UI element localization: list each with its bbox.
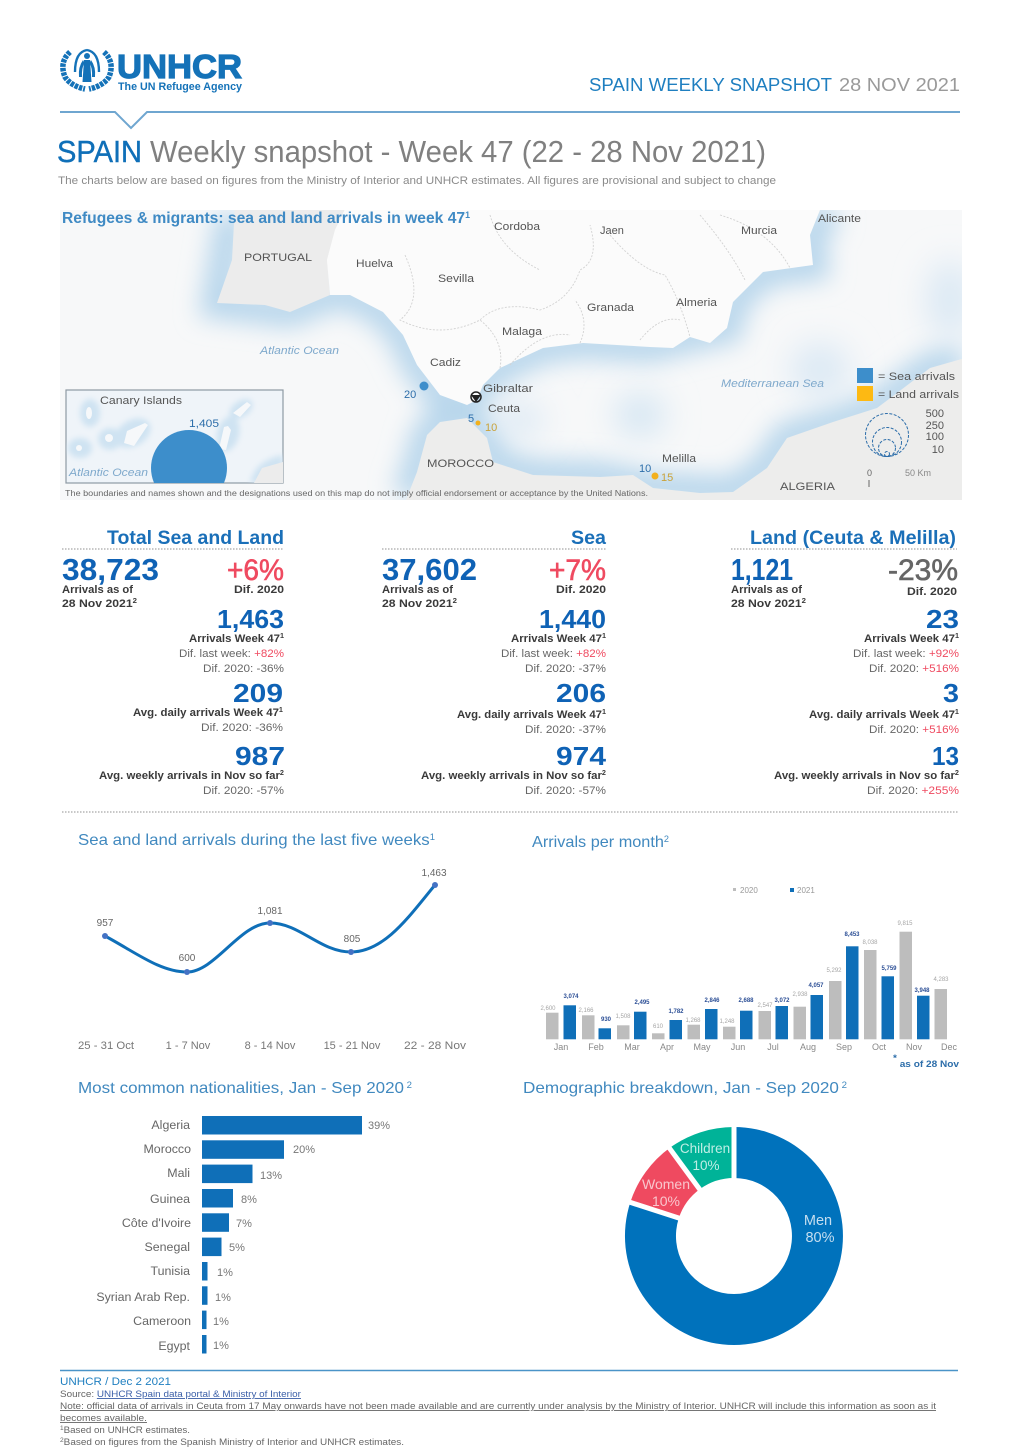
heading: nationalities: 2 [404,1080,412,1090]
line chart: last five weeks: 22 - 28 Nov [404,1040,467,1052]
stat: weekly average: Dif. 2020: -57% [203,785,284,797]
bar chart: arrivals per month: 3,072 [774,998,790,1004]
stat: daily arrivals: Dif. 2020: -36% [201,722,283,734]
logo tagline: The UN Refugee Agency [118,81,243,93]
line chart: last five weeks [78,868,467,1052]
stat: land arrivals: 1,121 [731,552,793,587]
heading: five weeks chart: Sea and land arrivals during the last five weeks [78,832,412,849]
header date line [589,75,960,95]
bar chart: arrivals per month: 3,074 [563,994,579,1000]
map legend: = Sea arrivals [878,371,956,383]
bar chart: arrivals per month: 2,846 [704,998,720,1004]
line chart: last five weeks: 8 - 14 Nov [245,1040,296,1052]
bar chart: arrivals per month: May [693,1042,711,1052]
bar chart: nationalities: 1% [217,1267,233,1279]
map place labels: ALGERIA [780,481,836,493]
bar chart: nationalities: Algeria [151,1118,190,1132]
stat: sea weekly average [421,741,607,797]
stat: land weekly average [774,741,959,797]
line chart: last five weeks: 957 [97,918,114,929]
bar chart: nationalities: Egypt [158,1339,191,1353]
bar chart: arrivals per month: 8,453 [844,932,860,938]
map place labels: MOROCCO [427,458,494,470]
stat: weekly arrivals: 1 [280,633,284,640]
bar chart: arrivals per month: 4,283 [933,977,949,983]
bar chart: arrivals per month: 1,782 [668,1009,684,1015]
title: Weekly snapshot - Week 47 (22 - 28 Nov 2021) [150,134,766,169]
bar chart: arrivals per month: Nov [906,1042,922,1052]
bar chart: nationalities: 7% [236,1218,252,1230]
map title: 1 [465,210,470,220]
map place labels: Alicante [818,213,861,225]
map markers: arrivals: 20 [404,389,416,401]
chart note: * [893,1053,897,1063]
map place labels: Atlantic Ocean [259,345,339,357]
bar chart: nationalities: Senegal [145,1240,190,1254]
stat: sea weekly arrivals: Arrivals Week 47 [511,633,599,645]
bar chart: arrivals per month: 5,759 [881,966,897,972]
bar chart: nationalities: Tunisia [151,1264,190,1278]
subtitle: The charts below are based on figures from the Ministry of Interior and UNHCR estimates. All figures are provisional and subject to change [58,175,776,187]
stat: daily arrivals: Avg. daily arrivals Week 47 [133,707,274,719]
stat: sea difference 2020: +7% [549,554,606,587]
panel: land [731,528,959,797]
map place labels: Sevilla [438,273,475,285]
stat: land weekly arrivals: 1 [955,633,959,640]
logo wordmark: UNHCR [117,48,242,85]
map legend: 500 [926,408,944,420]
stat: land daily arrivals: 3 [943,678,959,708]
map place labels: Murcia [741,225,778,237]
segment: women [630,1148,700,1218]
footer: sources and notes: becomes available. [60,1413,147,1423]
map place labels: Mediterranean Sea [721,378,824,390]
bar chart: nationalities: 1% [213,1316,229,1328]
map markers: arrivals: 10 [485,422,497,434]
stat: sea weekly average: Dif. 2020: -57% [525,785,606,797]
bar chart: arrivals per month: Jul [767,1042,779,1052]
title: SPAIN [57,134,142,169]
heading: demographics: 2 [839,1080,847,1090]
bar chart: arrivals per month: 1,268 [685,1018,701,1024]
bar chart: nationalities: Mali [167,1166,190,1180]
stat: total arrivals: 28 Nov 2021 [62,598,126,610]
stat: weekly arrivals: 1,463 [217,604,284,634]
heading: demographics: Demographic breakdown, Jan - Sep 2020 [523,1080,818,1097]
segment: women: 10% [652,1193,680,1209]
stat: total arrivals: Arrivals as of [62,584,133,596]
stat: weekly arrivals: Dif. 2020: -36% [203,663,284,675]
bar chart: arrivals per month: Aug [800,1042,816,1052]
map place labels: Ceuta [488,403,521,415]
stat: land difference 2020: -23% [888,554,958,587]
panel: map of sea and land arrivals [60,205,974,506]
land: North Africa [404,358,965,505]
bar chart: nationalities: Syrian Arab Rep. [96,1290,190,1304]
stat: land arrivals: 28 Nov 2021 [731,598,795,610]
stat: sea weekly arrivals: Dif. 2020: -37% [525,663,606,675]
bar chart: nationalities: Côte d'Ivoire [122,1216,191,1230]
segment: men [625,1127,843,1345]
map legend: 0 [867,468,872,478]
map place labels: PORTUGAL [244,252,312,264]
map markers: arrivals: 5 [468,413,474,425]
bar chart: arrivals per month: 8,038 [862,940,878,946]
stat: weekly average: Avg. weekly arrivals in Nov so far [99,770,273,782]
line chart: last five weeks: 1 - 7 Nov [166,1040,211,1052]
segment: children: 10% [692,1158,720,1173]
header date line: SPAIN WEEKLY SNAPSHOT [589,75,832,95]
heading: nationalities: Most common nationalities, Jan - Sep 2020 [78,1080,385,1097]
line chart: last five weeks: 25 - 31 Oct [78,1040,134,1052]
icon: UNHCR emblem [63,50,111,89]
footer: sources and notes: 1 [60,1426,64,1432]
line chart: last five weeks: 805 [344,934,361,945]
segment: children [670,1127,734,1189]
bar chart: nationalities: 8% [241,1194,257,1206]
stat: sea weekly arrivals [501,604,606,675]
map inset: Canary Islands: Canary Islands [100,395,183,407]
stat: weekly average: 2 [280,770,284,777]
heading: sea: Sea [571,528,606,549]
map legend: 250 [926,420,944,432]
map place labels: Cordoba [494,221,541,233]
bar chart: arrivals per month: Sep [836,1042,852,1052]
footer: sources and notes: Note: official data of arrivals in Ceuta from 17 May onwards have not been made available and are currently under analysis by the Ministry of Interior. UNHCR will include this information as soon as it [60,1401,937,1411]
logo: UNHCR [63,48,243,93]
donut chart: demographics [625,1122,843,1345]
bar chart: arrivals per month: 2,938 [792,992,808,998]
bar chart: arrivals per month: 5,292 [826,968,842,974]
map markers: arrivals: 15 [661,472,673,484]
stat: land daily arrivals [809,678,959,736]
bar chart: arrivals per month: 1,248 [719,1019,735,1025]
heading: total: Total Sea and Land [107,528,284,549]
bar chart: nationalities: 5% [229,1242,245,1254]
bar chart: arrivals per month: Jun [731,1042,745,1052]
bar chart: arrivals per month: 4,057 [808,983,824,989]
bar chart: nationalities: 13% [260,1170,282,1182]
land: Spain [327,205,822,405]
panel: sea [382,528,607,797]
map place labels: Gibraltar [483,383,533,395]
stat: total arrivals: 2 [133,598,137,605]
heading: arrivals per month: 2 [664,834,669,844]
stat: land weekly arrivals: 23 [926,604,959,634]
stat: sea weekly arrivals: Dif. last week: +82% [501,648,606,660]
stat: sea daily arrivals [457,678,606,736]
chart legend [733,886,815,895]
map disclaimer: The boundaries and names shown and the designations used on this map do not imply official endorsement or acceptance by the United Nations. [65,489,648,498]
bar chart: arrivals per month: 2,688 [738,998,754,1004]
stat: sea arrivals [382,552,477,610]
stat: land weekly arrivals: Dif. last week: +92% [853,648,959,660]
bar chart: arrivals per month: 930 [601,1017,612,1023]
bar chart: arrivals per month: Feb [588,1042,604,1052]
stat: land arrivals [731,552,806,610]
stat: sea arrivals: 28 Nov 2021 [382,598,446,610]
bar chart: arrivals per month: 2,600 [540,1006,556,1012]
map markers: arrivals: 10 [639,463,651,475]
heading: land: Land (Ceuta & Melilla) [750,528,956,549]
map place labels [244,213,861,493]
bar chart: nationalities [96,1116,390,1354]
stat: sea daily arrivals: 206 [556,678,606,708]
stat: land arrivals: Arrivals as of [731,584,802,596]
bar chart: arrivals per month: 2,547 [757,1003,773,1009]
map place labels: Cadiz [430,357,461,369]
bar chart: arrivals per month: Apr [660,1042,674,1052]
segment: men: Men [804,1213,832,1229]
bar chart: nationalities: 39% [368,1120,390,1132]
stat: difference 2020: +6% [227,554,284,587]
map place labels: Jaen [600,225,624,237]
stat: sea weekly arrivals: 1,440 [539,604,606,634]
footer: sources and notes: Based on UNHCR estimates. [64,1425,190,1435]
stat: land weekly average: Avg. weekly arrivals in Nov so far [774,770,948,782]
map inset: Canary Islands: 1,405 [189,418,219,430]
stat: weekly average: 987 [235,741,285,771]
stat: land difference 2020: Dif. 2020 [907,586,957,598]
heading: arrivals per month: Arrivals per month [532,834,662,851]
bar chart: arrivals per month: 3,948 [914,988,930,994]
map inset: Canary Islands [65,389,284,484]
stat: land weekly average: 2 [955,770,959,777]
bar chart: arrivals per month: 610 [653,1024,664,1030]
bar chart: nationalities: 20% [293,1144,315,1156]
land: Portugal [217,205,347,312]
bar chart: nationalities: 1% [213,1340,229,1352]
stat: sea difference 2020: Dif. 2020 [556,584,606,596]
stat: difference 2020: Dif. 2020 [234,584,284,596]
stat: total arrivals: 38,723 [62,552,159,587]
footer: sources and notes: Based on figures from the Spanish Ministry of Interior and UNHCR estimates. [64,1437,404,1447]
bar chart: arrivals per month: Oct [872,1042,886,1052]
map inset: Canary Islands: Atlantic Ocean [68,467,148,479]
stat: sea weekly arrivals: 1 [602,633,606,640]
map legend: = Land arrivals [878,389,960,401]
stat: land daily arrivals: 1 [955,709,959,716]
map place labels: Melilla [662,453,697,465]
footer: sources and notes [60,1376,937,1447]
map markers: arrivals [404,382,673,484]
bar chart: nationalities: 1% [215,1292,231,1304]
stat: sea weekly average: 974 [556,741,607,771]
stat: land daily arrivals: Avg. daily arrivals Week 47 [809,709,950,721]
stat: sea daily arrivals: Dif. 2020: -37% [525,724,606,736]
map place labels: Almeria [676,297,718,309]
bar chart: arrivals per month: 9,815 [897,921,913,927]
stat: weekly arrivals [179,604,284,675]
stat: total arrivals [62,552,159,610]
stat: land weekly average: 13 [932,741,959,771]
line chart: last five weeks: 15 - 21 Nov [324,1040,381,1052]
bar chart: arrivals per month: Mar [624,1042,640,1052]
stat: sea weekly average: 2 [602,770,606,777]
chart legend: 2020 [740,886,758,895]
map place labels: Granada [587,302,635,314]
heading: five weeks chart: 1 [430,832,435,842]
bar chart: arrivals per month: Dec [941,1042,957,1052]
stat: daily arrivals: 1 [279,707,283,714]
stat: daily arrivals: 209 [233,678,283,708]
stat: land weekly average: Dif. 2020: +255% [867,785,959,797]
map place labels: Huelva [356,258,394,270]
bar chart: arrivals per month: 1,508 [615,1014,631,1020]
segment: children: Children [680,1141,730,1156]
stat: weekly average [99,741,285,797]
bar chart: arrivals per month: 2,495 [634,1000,650,1006]
stat: land daily arrivals: Dif. 2020: +516% [869,724,959,736]
bar chart: nationalities: Morocco [143,1142,191,1156]
stat: land weekly arrivals: Arrivals Week 47 [864,633,952,645]
map legend: 100 [926,431,944,443]
line chart: last five weeks: 1,463 [421,868,447,879]
bar chart: arrivals per month: Jan [554,1042,568,1052]
stat: weekly arrivals: Arrivals Week 47 [189,633,277,645]
stat: sea arrivals: Arrivals as of [382,584,453,596]
header date line: 28 NOV 2021 [839,75,960,95]
bar chart: nationalities: Cameroon [133,1314,191,1328]
footer: sources and notes: 2 [60,1438,64,1444]
sea glow [217,210,962,495]
sea patches [496,260,974,438]
footer: sources and notes: Source: UNHCR Spain data portal & Ministry of Interior [60,1389,301,1399]
province borders [400,215,790,368]
line chart: last five weeks: 600 [179,953,196,964]
map title: Refugees & migrants: sea and land arrivals in week 47 [62,210,475,227]
bar chart: nationalities: Guinea [150,1192,190,1206]
chart note: as of 28 Nov [897,1059,959,1069]
segment: women: Women [642,1176,690,1192]
stat: sea arrivals: 37,602 [382,552,477,587]
map place labels: Malaga [502,326,543,338]
stat: daily arrivals [133,678,283,734]
map legend [857,368,960,487]
footer: sources and notes: UNHCR / Dec 2 2021 [60,1376,171,1388]
stat: sea arrivals: 2 [453,598,457,605]
segment: men: 80% [805,1230,835,1246]
line chart: last five weeks: 1,081 [257,906,283,917]
stat: land arrivals: 2 [802,598,806,605]
stat: sea weekly average: Avg. weekly arrivals in Nov so far [421,770,595,782]
bar chart: arrivals per month: 2,166 [578,1008,594,1014]
stat: land weekly arrivals: Dif. 2020: +516% [869,663,959,675]
stat: weekly arrivals: Dif. last week: +82% [179,648,284,660]
stat: sea daily arrivals: Avg. daily arrivals Week 47 [457,709,598,721]
panel: total sea and land [62,528,285,797]
bar chart: arrivals per month [540,886,959,1069]
chart legend: 2021 [797,886,815,895]
map legend: 50 Km [905,468,931,478]
map legend: 10 [932,444,944,456]
stat: sea daily arrivals: 1 [602,709,606,716]
stat: land weekly arrivals [853,604,959,675]
